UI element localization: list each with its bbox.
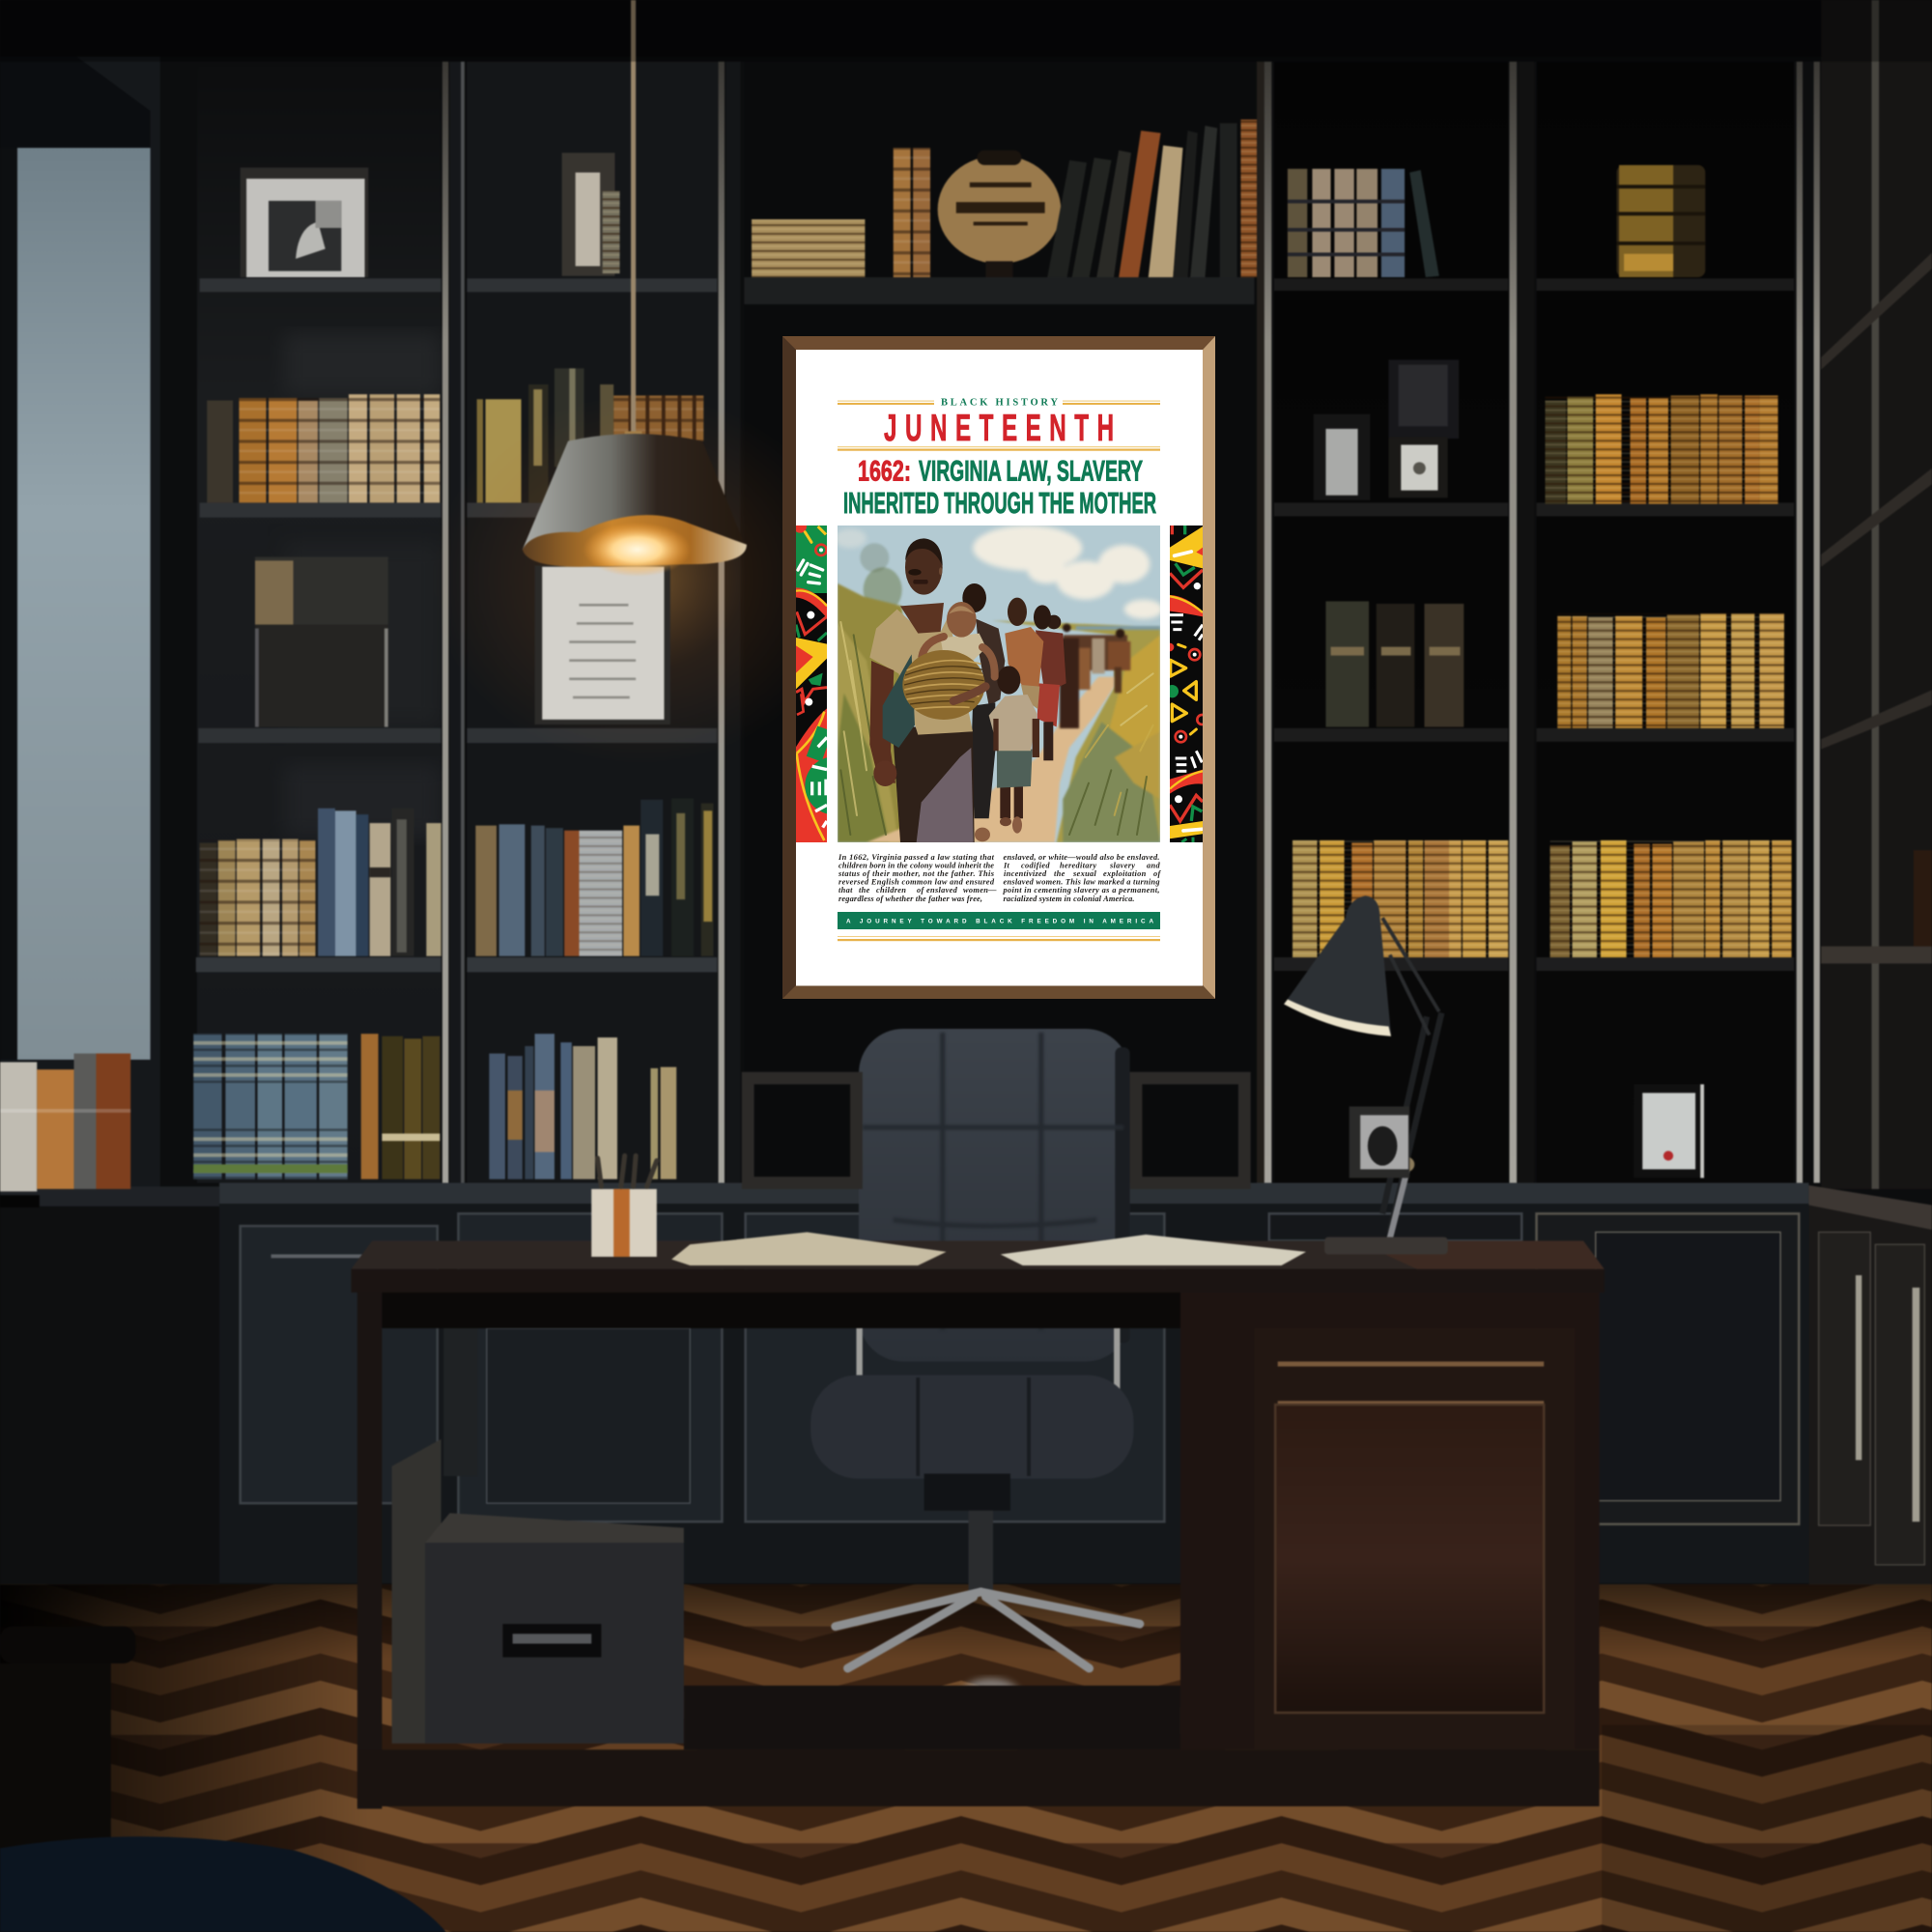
baby <box>922 602 995 677</box>
top-left framed photo <box>241 167 368 277</box>
footer banner: A JOURNEY TOWARD BLACK FREEDOM IN AMERICA <box>846 918 1153 925</box>
right pattern band <box>1170 526 1203 842</box>
right side wall shelves <box>1821 0 1932 1189</box>
books: shelf 4 left <box>200 809 441 956</box>
poster frame <box>782 336 1215 999</box>
eyebrow: black history: BLACK HISTORY <box>941 398 1058 408</box>
dirt path <box>867 677 1115 842</box>
headline: INHERITED THROUGH THE MOTHER <box>843 486 1156 520</box>
pendant lamp <box>431 0 850 764</box>
left column: of <box>917 886 924 895</box>
ceiling shade <box>0 0 1932 62</box>
brass cylinder <box>1616 165 1705 277</box>
books: shelf 5 left <box>193 1034 440 1179</box>
third walker <box>1005 598 1043 709</box>
painting: mother and children walking <box>835 526 1163 842</box>
title: juneteenth: JUNETEENTH <box>884 407 1114 448</box>
window wall <box>0 0 160 1195</box>
center lower shelf niche <box>748 1078 1244 1182</box>
left column: the <box>859 886 870 895</box>
right column: codified <box>1021 862 1050 869</box>
right column: and <box>1147 862 1160 869</box>
right column: the <box>1054 869 1065 878</box>
left column: children <box>876 886 906 895</box>
right column: sexual <box>1072 869 1097 878</box>
distant tree <box>860 543 902 612</box>
books: right shelf 4 <box>1293 840 1792 957</box>
round plaque <box>938 151 1061 277</box>
distant column <box>1060 624 1130 728</box>
bookshelf carcass <box>0 0 1932 1182</box>
right column: enslaved women. This law marked a turning <box>1003 877 1159 887</box>
small frames lower shelf <box>1350 1084 1704 1178</box>
sky clouds <box>835 526 1163 619</box>
headline: 1662: <box>858 456 911 487</box>
books: shelf 5 second bay <box>489 1034 676 1179</box>
grass fields <box>838 583 1160 842</box>
desk <box>352 1240 1605 1808</box>
framed document <box>535 565 670 724</box>
center shelf objects <box>752 120 1257 277</box>
left column: regardless of whether the father was free, <box>838 895 982 903</box>
books: shelf 2 second bay <box>477 368 703 502</box>
desk lamp <box>1284 895 1448 1254</box>
footer banner <box>838 912 1160 929</box>
small frame and patterned book <box>562 153 620 276</box>
books: right shelf 3 <box>1557 613 1784 728</box>
body text <box>838 853 1161 903</box>
left column: enslaved <box>926 886 958 895</box>
second walker <box>962 583 1005 841</box>
textured boxes <box>255 557 388 727</box>
left column: that <box>838 886 853 895</box>
right column: racialized system in colonial America. <box>1003 895 1134 903</box>
desk chair <box>810 1029 1140 1713</box>
foreground cushion <box>0 1836 446 1932</box>
lower cabinets <box>173 1182 1808 1583</box>
right column: It <box>1003 862 1010 869</box>
middle-right frames <box>1314 359 1459 500</box>
filing cabinet <box>392 1439 684 1744</box>
framed poster <box>782 336 1215 999</box>
mother <box>869 538 975 842</box>
headline <box>843 456 1156 520</box>
pen cup <box>591 1155 657 1257</box>
left column: reversed English common law and ensured <box>838 877 995 887</box>
right column: point in cementing slavery as a permanent, <box>1003 886 1159 895</box>
headline: VIRGINIA LAW, SLAVERY <box>919 456 1143 487</box>
left column: children born in the colony would inherit the <box>838 862 994 869</box>
left column: women— <box>963 886 997 895</box>
books: dark olive trio <box>1325 601 1463 727</box>
right column: incentivized <box>1004 869 1047 878</box>
woven basket <box>902 650 985 720</box>
right column: slavery <box>1109 862 1135 869</box>
left pattern band <box>796 526 827 842</box>
left counter with book stack <box>0 1054 219 1614</box>
books: shelf 2 left <box>207 394 440 502</box>
open books on desk <box>671 1233 1306 1265</box>
right column: of <box>1153 869 1161 878</box>
left column <box>838 853 997 903</box>
right wall cabinet <box>1808 1185 1932 1932</box>
footer rule <box>838 936 1160 941</box>
right column: enslaved, or white—would also be enslaved. <box>1003 853 1159 862</box>
right column: hereditary <box>1060 862 1096 869</box>
parquet floor <box>0 1584 1932 1932</box>
top-right books <box>1288 169 1439 277</box>
right column: exploitation <box>1103 869 1147 878</box>
stool silhouette <box>0 1627 135 1873</box>
right column <box>1003 853 1161 903</box>
metal uprights <box>442 62 1820 1182</box>
shelf boards <box>196 277 1794 972</box>
left column: In 1662, Virginia passed a law stating that <box>838 853 995 862</box>
books: shelf 4 second bay <box>475 799 714 956</box>
left column: status of their mother, not the father. This <box>838 869 994 878</box>
grass strokes <box>840 622 1153 835</box>
books: right shelf 2 <box>1545 394 1778 504</box>
child <box>989 666 1039 834</box>
fourth walker <box>1034 605 1066 760</box>
